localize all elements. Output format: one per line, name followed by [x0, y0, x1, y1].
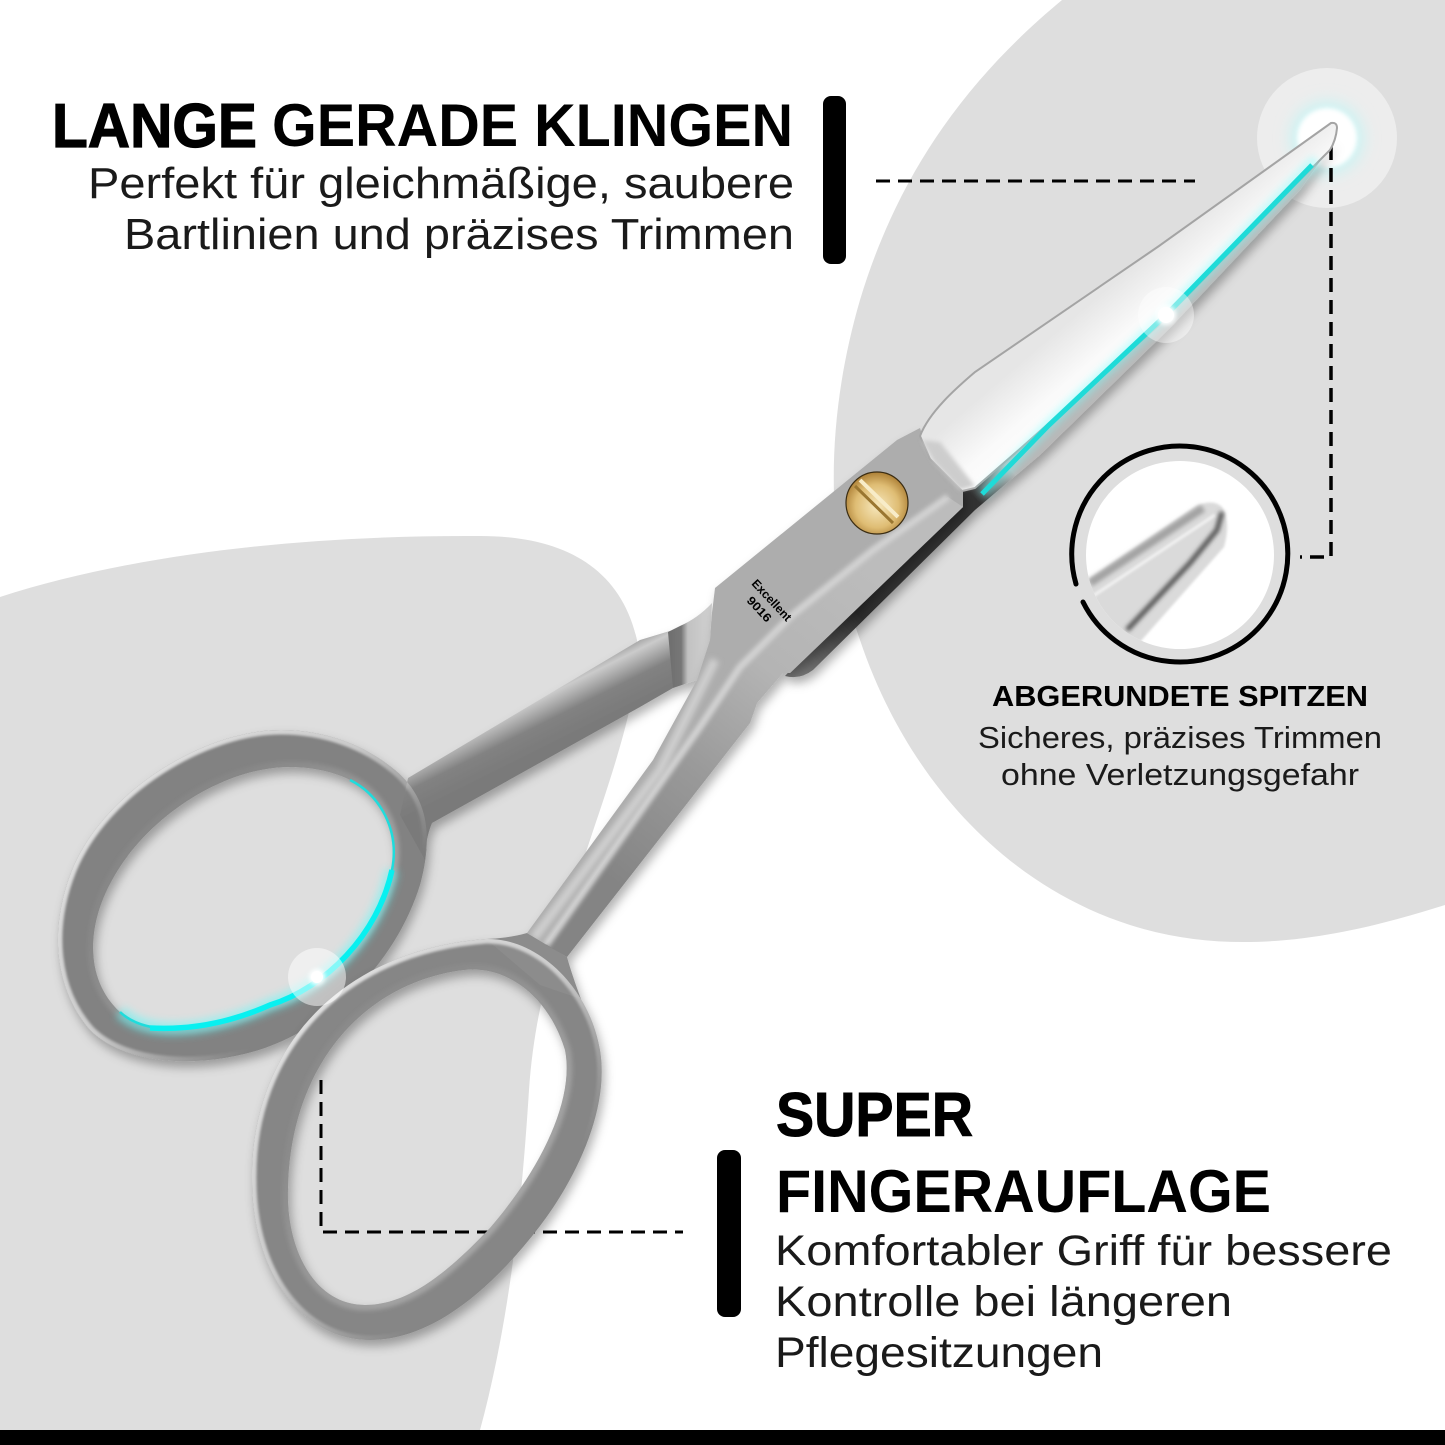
lower finger loop [252, 428, 963, 1340]
engraving: Excellent [749, 576, 795, 624]
heading: long straight blades: LANGE [52, 92, 257, 161]
dashed leader: finger rest [321, 1080, 683, 1232]
text: finger rest description: Kontrolle bei längeren [775, 1278, 1232, 1326]
text: rounded tips description: ohne Verletzungsgefahr [1001, 757, 1359, 792]
text: finger rest description [775, 1227, 1392, 1377]
dashed leader: rounded tips [1300, 146, 1331, 557]
back blade [785, 140, 1335, 677]
background blob: lower left [0, 536, 638, 1430]
text: blades description [88, 159, 794, 259]
teal highlight on ring [120, 780, 394, 1029]
text: finger rest description: Komfortabler Griff für bessere [775, 1227, 1392, 1275]
upper finger loop [58, 603, 712, 1061]
detail inset: rounded tip [1072, 446, 1288, 662]
text: rounded tips description: Sicheres, präzises Trimmen [978, 720, 1382, 755]
accent bar: blades [823, 96, 846, 264]
background blob: upper right [834, 0, 1445, 942]
text: rounded tips description [978, 720, 1382, 792]
accent bar: finger rest [717, 1150, 741, 1317]
highlight dot: ring [288, 948, 346, 1006]
heading: finger rest: SUPER [776, 1081, 973, 1150]
blade bevel [922, 440, 975, 490]
engraving: 9016 [744, 593, 775, 625]
bottom bar [0, 1430, 1445, 1445]
highlight dot: blade [1138, 287, 1194, 343]
heading: long straight blades [52, 92, 793, 161]
text: blades description: Perfekt für gleichmäßige, saubere [88, 159, 794, 208]
scissor body and lower shaft [527, 428, 963, 957]
front blade [920, 123, 1337, 491]
heading: long straight blades: GERADE KLINGEN [272, 92, 793, 159]
scissors [58, 123, 1337, 1340]
heading: rounded tips: ABGERUNDETE SPITZEN [992, 681, 1368, 713]
heading: finger rest: FINGERAUFLAGE [776, 1158, 1271, 1225]
text: finger rest description: Pflegesitzungen [775, 1329, 1103, 1377]
heading: finger rest [776, 1081, 1271, 1225]
tip highlight halo [1257, 68, 1397, 208]
brass screw [846, 472, 908, 534]
text: blades description: Bartlinien und präzises Trimmen [124, 210, 794, 259]
dashed leader: blades [876, 180, 1195, 182]
teal cutting edge [982, 160, 1316, 494]
